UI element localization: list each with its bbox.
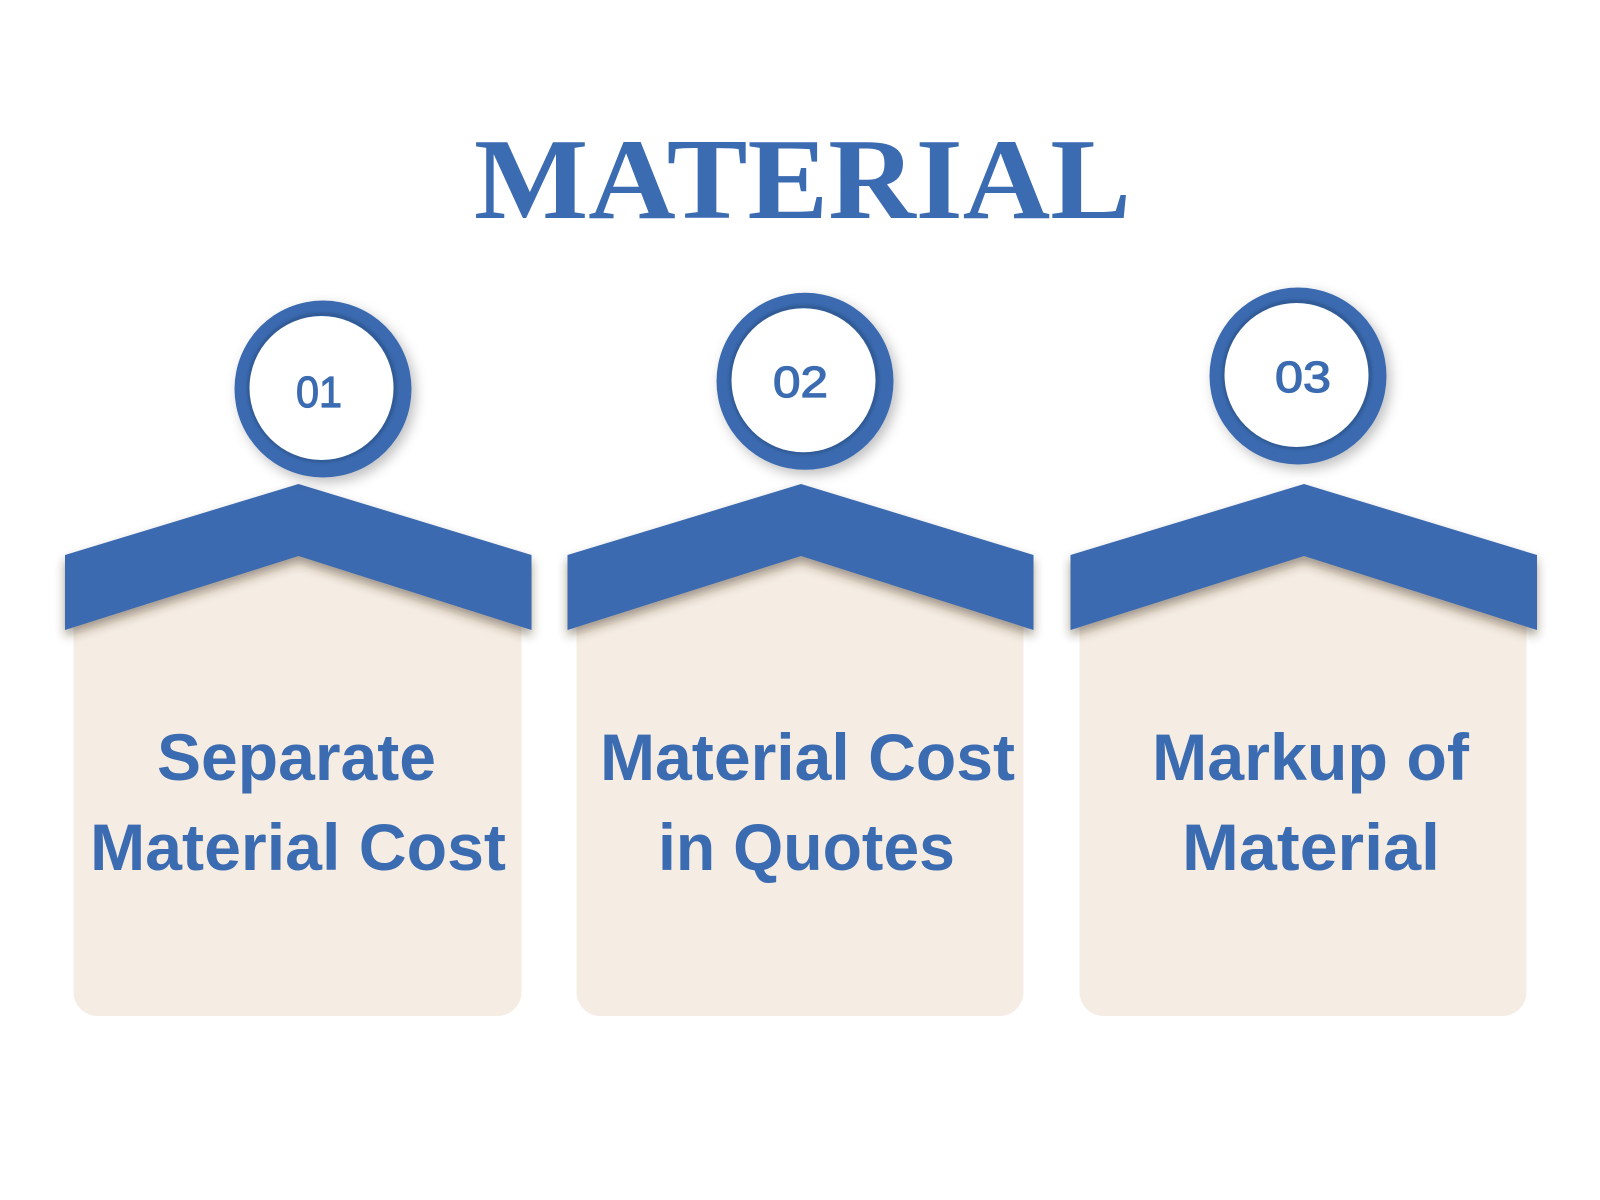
card text 3: Markup of [1152, 720, 1470, 794]
badge 02 [716, 293, 894, 470]
badge 02: 02 [773, 358, 828, 407]
card text 3: Material [1182, 810, 1440, 884]
chevron 2 [568, 484, 1034, 630]
panel: material cost in quotes [568, 293, 1034, 1016]
badge 03 [1210, 288, 1386, 464]
title: MATERIAL [474, 116, 1131, 243]
card background 1 [74, 520, 522, 1016]
panel: separate material cost [65, 300, 532, 1016]
badge 01: 01 [296, 368, 342, 417]
card background 2 [576, 520, 1024, 1016]
card text 1: Material Cost [90, 810, 506, 884]
card text 2: in Quotes [658, 810, 955, 884]
card text 2 [600, 720, 1015, 884]
chevron 3 [1070, 484, 1537, 630]
badge 01 [234, 300, 412, 478]
card text 2: Material Cost [600, 720, 1015, 794]
chevron 1 [65, 484, 532, 630]
card text 1: Separate [157, 720, 436, 794]
card text 3 [1152, 720, 1470, 884]
panel: markup of material [1070, 288, 1537, 1016]
card background 3 [1080, 520, 1526, 1016]
badge 03: 03 [1275, 353, 1331, 402]
card text 1 [90, 720, 506, 884]
